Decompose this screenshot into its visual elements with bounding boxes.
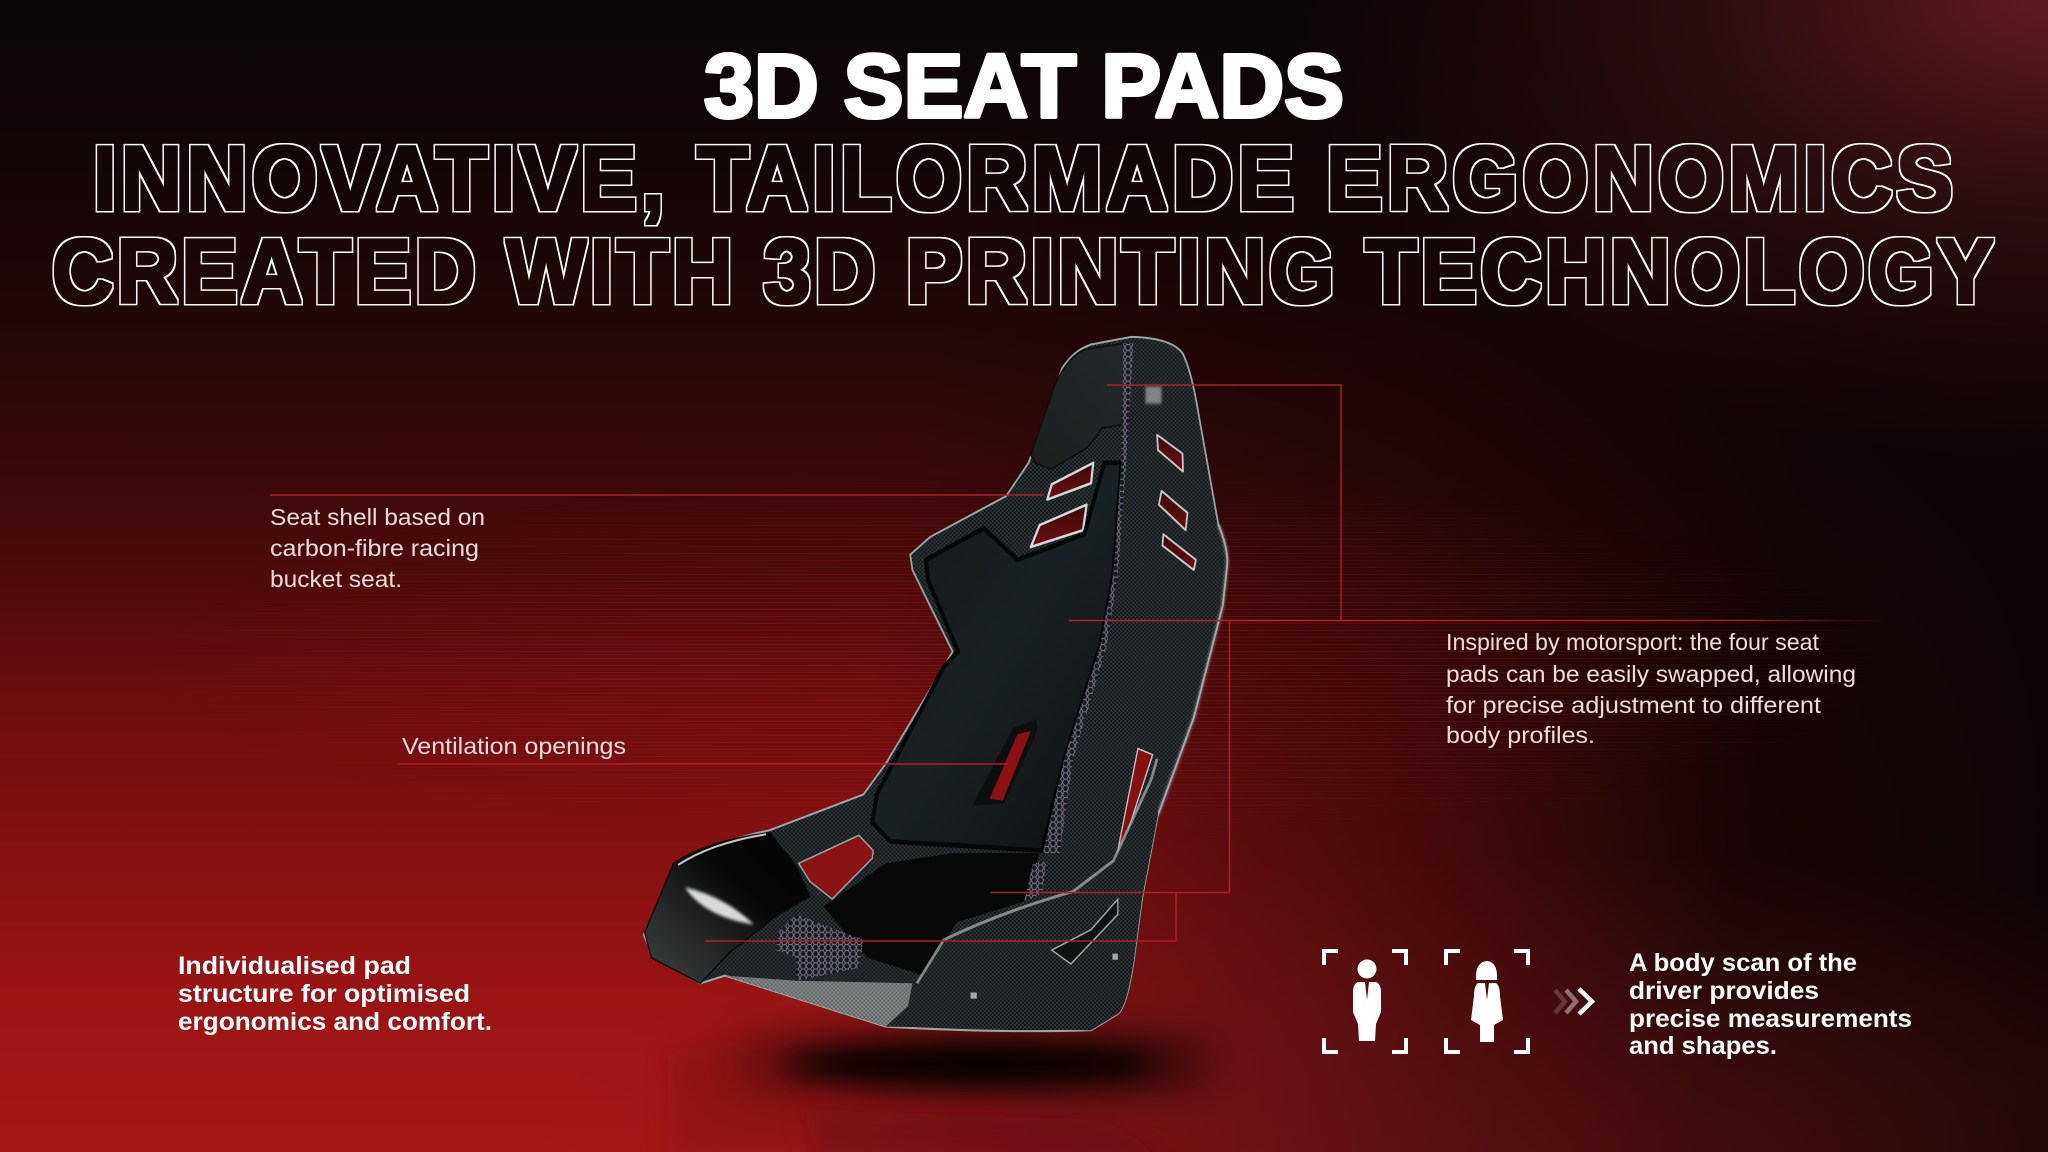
front pad mesh patch bbox=[776, 914, 863, 981]
label: individualised pad structure bbox=[178, 952, 492, 1036]
label: body scan: and shapes. bbox=[1629, 1032, 1777, 1060]
label: seat shell: Seat shell based on bbox=[270, 504, 485, 530]
back pad bbox=[872, 463, 1121, 851]
seat floor shadow bbox=[668, 1040, 1215, 1152]
shell fastener bbox=[971, 954, 1118, 999]
label: body scan: precise measurements bbox=[1629, 1005, 1912, 1033]
label: seat shell: bucket seat. bbox=[270, 566, 402, 592]
right slots bbox=[1157, 435, 1196, 570]
front opening bbox=[799, 835, 873, 899]
label: swappable pads bbox=[1446, 629, 1856, 748]
front thigh pad bbox=[645, 833, 810, 983]
label: body scan bbox=[1629, 949, 1912, 1060]
seat illustration bbox=[644, 337, 1227, 1031]
callout line: headrest pad bbox=[1107, 385, 1341, 620]
label: swappable pads: for precise adjustment to different bbox=[1446, 692, 1821, 718]
label: individualised pad structure: structure for optimised bbox=[178, 980, 470, 1008]
headrest highlight bbox=[1146, 386, 1162, 404]
callout line: back pad bbox=[1069, 620, 1887, 622]
callout line: seat shell bbox=[270, 494, 1044, 496]
label: body scan: A body scan of the bbox=[1629, 949, 1857, 977]
subtitle: outlined headline: CREATED WITH 3D PRINTING TECHNOLOGY bbox=[52, 220, 1994, 322]
label: swappable pads: Inspired by motorsport: the four seat bbox=[1446, 629, 1819, 655]
seat shell carbon fibre bbox=[644, 337, 1227, 1031]
headrest pad bbox=[1031, 343, 1126, 469]
icon: female body scan bbox=[1444, 949, 1530, 1054]
callout line: ventilation bbox=[398, 763, 1008, 765]
seat floor carbon bbox=[725, 976, 912, 1027]
label: individualised pad structure: Individualised pad bbox=[178, 952, 411, 980]
mesh strip bbox=[1043, 343, 1133, 853]
subtitle: outlined headline bbox=[52, 127, 1994, 322]
lumbar slot bbox=[973, 719, 1037, 806]
callout lines bbox=[270, 385, 1887, 941]
subtitle: outlined headline: INNOVATIVE, TAILORMADE ERGONOMICS bbox=[93, 127, 1953, 229]
label: body scan: driver provides bbox=[1629, 977, 1819, 1005]
pad rim highlight bbox=[678, 834, 766, 865]
pad highlight bbox=[685, 887, 754, 925]
label: seat shell: carbon-fibre racing bbox=[270, 535, 479, 561]
lower side shell bbox=[886, 759, 1158, 1030]
side long slot bbox=[1118, 749, 1153, 851]
icon: male body scan bbox=[1322, 949, 1408, 1054]
callout line: front pad bbox=[705, 892, 1176, 941]
title: 3D SEAT PADS bbox=[704, 37, 1344, 137]
callout line: seat pad bbox=[991, 620, 1230, 892]
label: seat shell bbox=[270, 504, 485, 592]
label: swappable pads: body profiles. bbox=[1446, 722, 1595, 748]
label: ventilation openings: Ventilation openings bbox=[402, 733, 626, 759]
label: individualised pad structure: ergonomics and comfort. bbox=[178, 1008, 492, 1036]
lower side slot bbox=[1052, 899, 1118, 964]
icon: chevrons arrow bbox=[1555, 989, 1592, 1014]
seat cushion pad bbox=[823, 853, 1040, 976]
label: swappable pads: pads can be easily swapped, allowing bbox=[1446, 661, 1856, 687]
mesh patch small bbox=[1024, 862, 1046, 902]
shell lip highlight bbox=[917, 759, 1157, 983]
seat edge highlights bbox=[1158, 524, 1227, 815]
upper left slots bbox=[1031, 463, 1093, 547]
